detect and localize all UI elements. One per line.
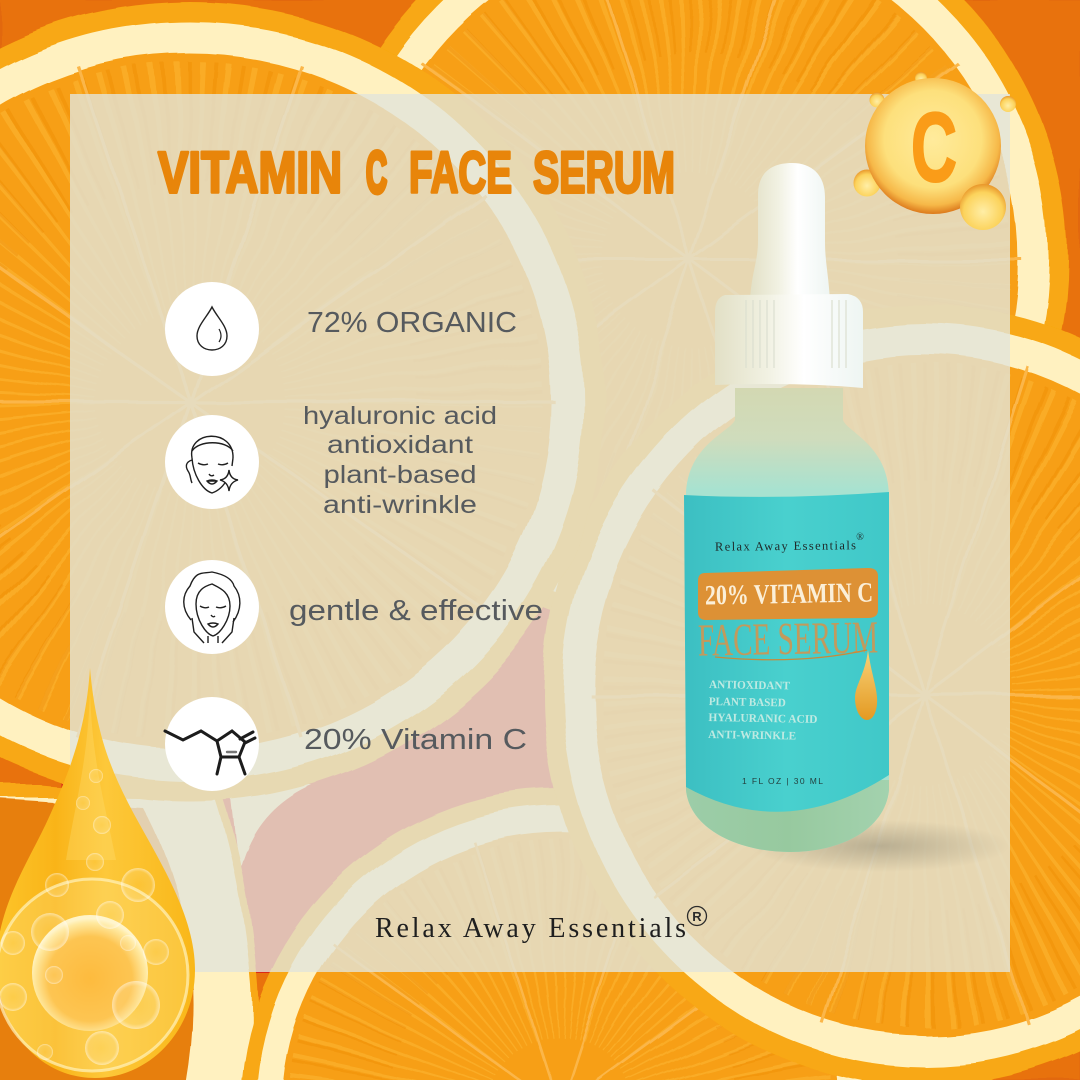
product: serum bottle — [684, 163, 1010, 872]
label size: 1 FL OZ | 30 ML — [742, 776, 823, 786]
label droplet — [855, 650, 877, 720]
label registered mark: ® — [856, 532, 864, 543]
bottle glass — [686, 388, 889, 852]
text: 20% vitamin C: 20% Vitamin C — [304, 724, 527, 756]
feature: 20% vitamin C — [165, 697, 527, 791]
label brand: Relax Away Essentials — [715, 538, 856, 554]
small bubbles — [0, 769, 169, 1065]
glass bottom tint — [686, 780, 889, 852]
label benefit list: HYALURANIC ACID — [708, 712, 818, 726]
label benefit list — [708, 679, 818, 743]
dropper bulb — [750, 163, 830, 300]
text: benefits list: antioxidant — [327, 431, 473, 459]
brand footer: Relax Away Essentials — [375, 913, 686, 944]
drop highlight — [66, 690, 116, 860]
title: FACE — [409, 140, 512, 206]
translucent panel — [70, 94, 1010, 972]
letter C: C — [911, 92, 957, 202]
label benefit list: ANTI-WRINKLE — [708, 729, 797, 743]
title: C — [366, 140, 387, 206]
bubble: medium — [112, 981, 160, 1029]
feature: gentle and effective — [165, 560, 543, 654]
product label — [684, 492, 889, 812]
vitamin C badge — [854, 72, 1016, 230]
icon: face with hands — [165, 560, 259, 654]
title: VITAMIN — [158, 140, 342, 206]
text: gentle and effective: gentle & effective — [289, 595, 543, 627]
icon: face with sparkle — [165, 415, 259, 509]
icon: molecule — [165, 697, 259, 791]
label orange pill — [698, 568, 878, 620]
registered mark — [688, 906, 706, 926]
registered mark: R — [692, 909, 702, 924]
label face serum: FACE SERUM — [698, 611, 878, 666]
label gold line — [715, 650, 867, 660]
title: SERUM — [533, 140, 675, 206]
text: 72% organic: 72% ORGANIC — [307, 307, 517, 339]
text: benefits list: anti-wrinkle — [323, 491, 477, 519]
small bubbles — [854, 72, 1016, 196]
label benefit list: ANTIOXIDANT — [709, 679, 790, 692]
text: benefits list: plant-based — [324, 461, 476, 489]
feature: benefits list — [165, 402, 497, 519]
main sphere — [32, 915, 148, 1031]
golden serum drop — [0, 668, 195, 1078]
icon: water drop — [165, 282, 259, 376]
text: benefits list — [303, 402, 497, 519]
bottle shadow — [750, 820, 1010, 872]
dropper collar — [715, 294, 863, 388]
label 20% vitamin C: 20% VITAMIN C — [705, 578, 873, 611]
text: benefits list: hyaluronic acid — [303, 402, 497, 430]
large bubble — [960, 184, 1006, 230]
glow ring — [0, 879, 188, 1071]
feature: 72% organic — [165, 282, 517, 376]
title — [158, 140, 675, 206]
main sphere — [865, 78, 1001, 214]
label benefit list: PLANT BASED — [709, 696, 786, 709]
